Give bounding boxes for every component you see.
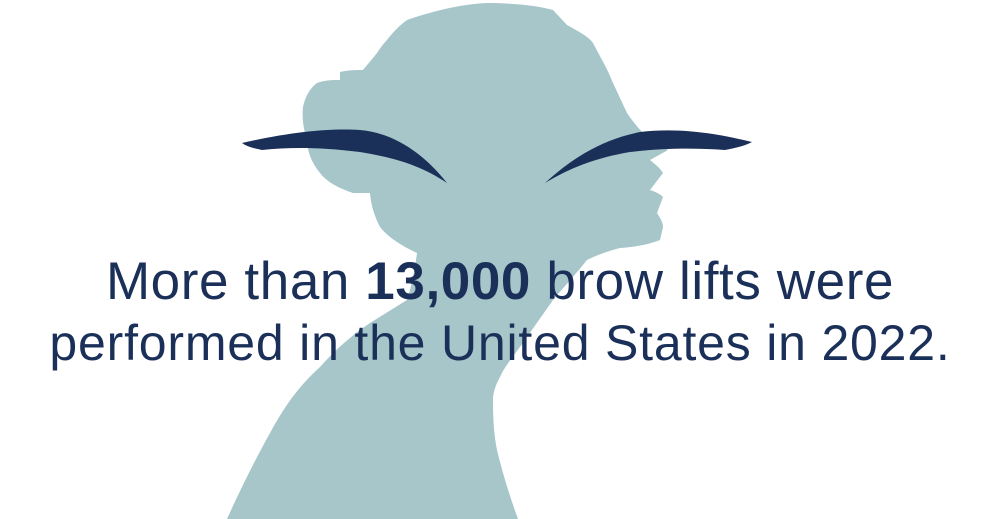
right eyebrow <box>545 130 752 183</box>
headline statistic text: More than 13,000 brow lifts were <box>106 252 894 311</box>
headline statistic text <box>49 252 951 371</box>
headline statistic text: performed in the United States in 2022. <box>49 315 951 371</box>
left eyebrow <box>242 130 447 183</box>
